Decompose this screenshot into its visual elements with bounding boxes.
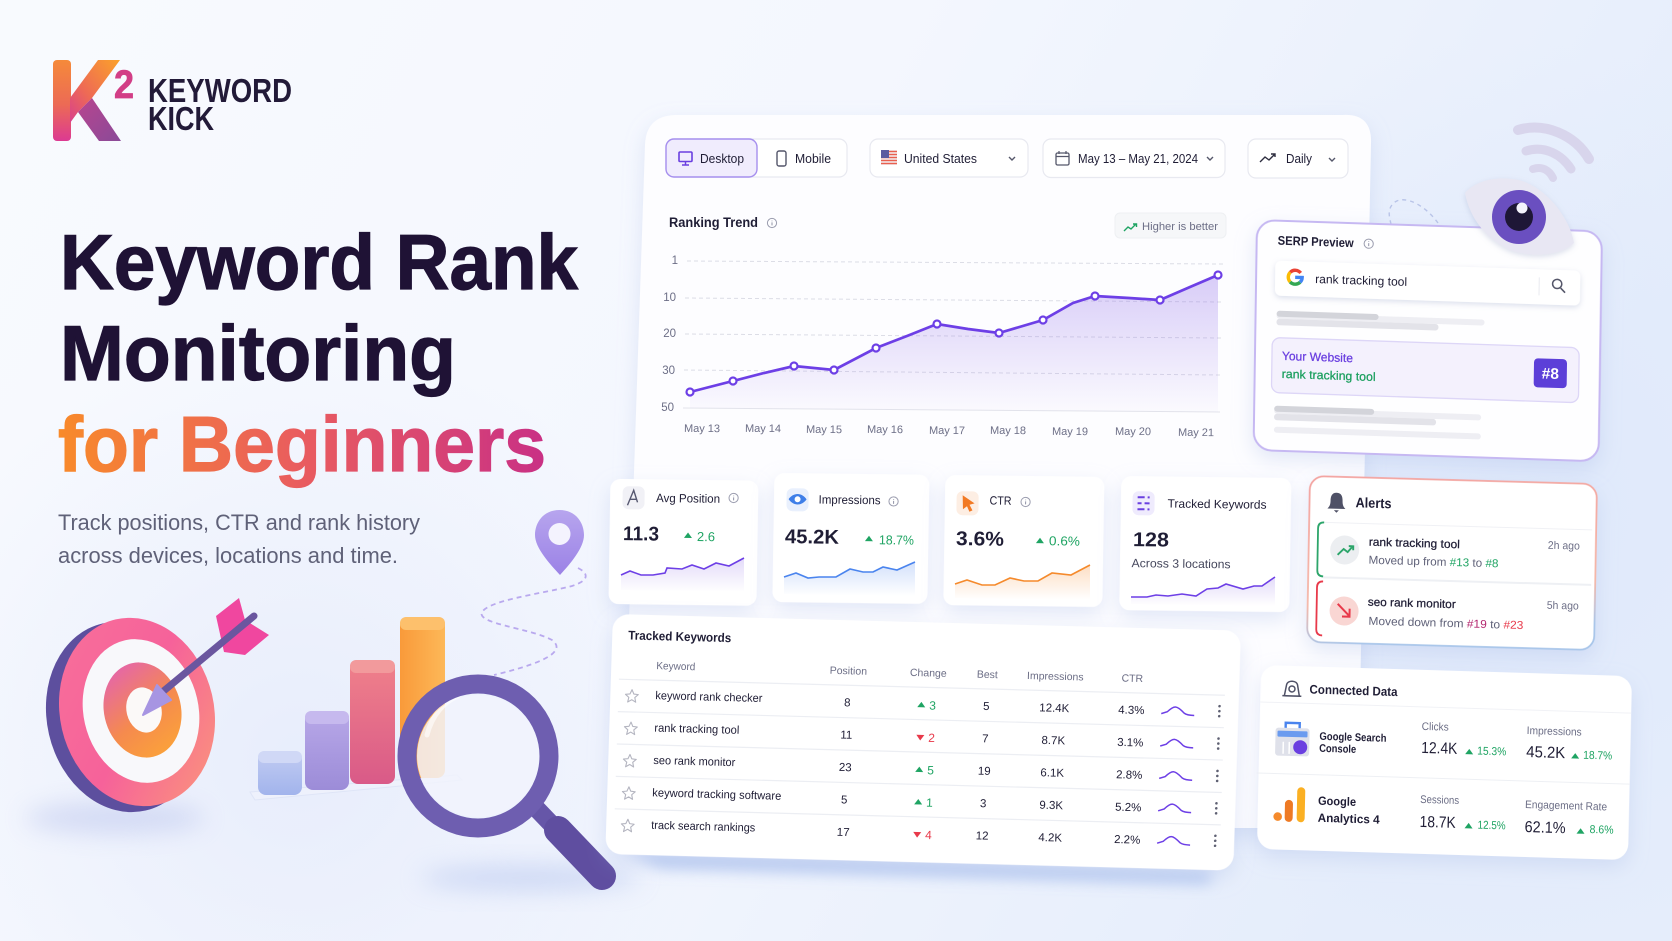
row: Google Search Console: 18.7% (1583, 750, 1612, 763)
highlighted result (1271, 338, 1579, 403)
row: track search rankings: 4.2K (1038, 832, 1063, 845)
alert: moved down: seo rank monitor (1368, 597, 1456, 611)
table header (656, 660, 1144, 685)
subtitle: across devices, locations and time. (58, 543, 398, 568)
interval dropdown: Daily (1286, 152, 1313, 166)
icon: position (622, 486, 645, 509)
panel: SERP preview (1254, 200, 1602, 461)
x axis labels: May 21 (1178, 427, 1214, 439)
row: keyword tracking software: 5 (841, 794, 848, 807)
stat card: CTR: CTR (989, 494, 1012, 508)
row: Google Analytics 4 (1273, 786, 1614, 839)
logo mark: K2 (53, 60, 134, 141)
row: Google Search Console (1275, 716, 1613, 766)
panel: connected data (1255, 665, 1632, 860)
logo wordmark: KICK (148, 100, 214, 137)
row: Google Analytics 4: 62.1% (1524, 819, 1566, 837)
illustration: magnifying glass (407, 684, 640, 891)
stat card: Impressions (772, 473, 929, 604)
highlighted result: rank tracking tool (1282, 367, 1376, 384)
illustration: target with arrow (25, 598, 269, 834)
row: rank tracking tool (624, 722, 1220, 753)
dashed orbit (1389, 200, 1438, 224)
row: seo rank monitor: 19 (978, 766, 991, 778)
title: Monitoring (60, 309, 456, 397)
row: Google Analytics 4: Analytics 4 (1318, 811, 1380, 827)
x axis labels: May 14 (745, 423, 781, 435)
table header: Impressions (1027, 670, 1084, 684)
y axis labels: 30 (662, 365, 675, 377)
y axis labels (661, 255, 678, 414)
placeholder results (1274, 406, 1481, 439)
y axis labels: 10 (663, 292, 676, 304)
row: Google Search Console: 15.3% (1477, 746, 1506, 758)
heading: SERP Preview (1278, 234, 1354, 250)
row: track search rankings (621, 819, 1217, 850)
title (58, 218, 579, 488)
row: Google Analytics 4: 8.6% (1589, 824, 1614, 837)
subtitle: Track positions, CTR and rank history (58, 510, 420, 535)
alert: moved down: 5h ago (1547, 600, 1579, 613)
line chart: ranking trend (661, 255, 1223, 439)
sparkline (784, 562, 915, 596)
row: keyword tracking software (622, 786, 1218, 817)
alert: moved up: 2h ago (1548, 540, 1580, 553)
row: keyword tracking software: 1 (926, 796, 933, 810)
y axis labels: 20 (663, 328, 676, 340)
row: track search rankings: 2.2% (1114, 834, 1140, 847)
row: keyword tracking software: 3 (980, 798, 987, 810)
stat card: Avg Position: 11.3 (623, 523, 659, 546)
logo wordmark (148, 72, 292, 137)
row: keyword rank checker (625, 689, 1221, 720)
row: track search rankings: 4 (925, 828, 932, 842)
row: Google Search Console: 12.4K (1421, 740, 1458, 758)
logo: Keyword Kick (53, 60, 292, 141)
highlighted result: Your Website (1282, 349, 1353, 365)
row: Google Analytics 4: 18.7K (1419, 814, 1456, 832)
device tabs (666, 139, 847, 177)
x axis labels: May 13 (684, 423, 720, 435)
row: Google Search Console: Impressions (1527, 725, 1582, 739)
panel: tracked keywords table (605, 614, 1241, 871)
stat card: CTR: 0.6% (1049, 533, 1081, 549)
table header: Position (829, 665, 867, 678)
stat card: Tracked Keywords (1119, 476, 1291, 612)
row: seo rank monitor: 6.1K (1040, 767, 1065, 780)
alert: moved down: Moved down from #19 to #23 (1368, 616, 1524, 632)
device tabs: Mobile (795, 152, 831, 166)
table header: Keyword (656, 660, 696, 673)
search box: rank tracking tool (1315, 272, 1407, 289)
x axis labels (684, 423, 1214, 439)
row: keyword tracking software: 5.2% (1115, 802, 1141, 814)
heading: Tracked Keywords (628, 628, 732, 645)
table header: Best (977, 669, 998, 681)
x axis labels: May 19 (1052, 426, 1088, 438)
row: track search rankings: 12 (976, 830, 989, 843)
row: Google Analytics 4: 12.5% (1477, 820, 1506, 832)
icon: database (1282, 681, 1302, 696)
row: keyword rank checker: 5 (983, 701, 990, 713)
table header: CTR (1121, 673, 1144, 685)
stat card: CTR: 3.6% (956, 528, 1004, 551)
row: seo rank monitor: 2.8% (1116, 769, 1143, 782)
interval dropdown (1248, 139, 1348, 178)
heading: Alerts (1355, 494, 1392, 511)
stat card: Tracked Keywords: Across 3 locations (1131, 556, 1231, 571)
row: keyword rank checker: 3 (929, 698, 937, 713)
row: keyword rank checker: keyword rank checker (655, 690, 763, 705)
row: Google Search Console: Google Search (1319, 731, 1387, 745)
filter bar (666, 139, 1348, 178)
stat card: Impressions: Impressions (818, 493, 881, 507)
date dropdown: May 13 – May 21, 2024 (1078, 152, 1198, 166)
row: Google Search Console: 45.2K (1526, 744, 1566, 762)
row: rank tracking tool: 11 (840, 730, 852, 742)
row: Google Analytics 4: Google (1318, 794, 1356, 809)
row: Google Analytics 4: Engagement Rate (1525, 799, 1607, 813)
alert: moved up (1317, 522, 1592, 585)
badge: higher is better (1115, 213, 1226, 238)
panel: dashboard (623, 115, 1371, 828)
icon: list (1132, 491, 1155, 515)
stat card: Impressions: 45.2K (785, 526, 840, 549)
row: keyword rank checker: 8 (844, 697, 851, 709)
alert: moved up: rank tracking tool (1369, 537, 1460, 551)
sparkline (621, 558, 744, 592)
row: Google Search Console: Console (1319, 743, 1356, 756)
icon: cursor (956, 491, 979, 515)
icon: location pin with dashed route (482, 510, 586, 675)
row: track search rankings: track search rankings (651, 820, 756, 835)
y axis labels: 1 (672, 255, 678, 267)
x axis labels: May 17 (929, 425, 965, 437)
stat card: Impressions: 18.7% (879, 532, 914, 548)
row: seo rank monitor: seo rank monitor (653, 755, 736, 769)
icon: analytics (1273, 786, 1305, 822)
icon: search console (1275, 722, 1310, 756)
stat card: Avg Position: Avg Position (656, 491, 720, 506)
icon: eye (786, 488, 809, 511)
date dropdown (1043, 139, 1225, 178)
row: keyword tracking software: 9.3K (1039, 800, 1064, 812)
y axis labels: 50 (661, 402, 674, 414)
stat card: Avg Position (608, 479, 758, 606)
stat card: CTR (943, 475, 1104, 607)
row: track search rankings: 17 (837, 827, 850, 839)
rank badge (1534, 358, 1567, 388)
x axis labels: May 18 (990, 425, 1026, 437)
icon: bell (1327, 493, 1346, 513)
heading: Connected Data (1309, 682, 1399, 699)
row: seo rank monitor: 23 (839, 762, 852, 774)
title: Keyword Rank (60, 218, 579, 306)
badge: higher is better: Higher is better (1142, 221, 1218, 233)
logo mark: K2: 2 (114, 63, 134, 107)
illustration: 3D bar chart (250, 617, 462, 800)
x axis labels: May 15 (806, 424, 842, 436)
x axis labels: May 16 (867, 424, 903, 436)
alert: moved up: Moved up from #13 to #8 (1368, 555, 1499, 570)
heading: Ranking Trend: Ranking Trend (669, 215, 758, 230)
row: seo rank monitor: 5 (927, 763, 934, 777)
rank badge: #8 (1542, 365, 1559, 383)
row: Google Analytics 4: Sessions (1420, 794, 1460, 807)
row: rank tracking tool: 2 (928, 731, 935, 745)
table drop shadow (625, 852, 1210, 884)
search box (1275, 261, 1580, 306)
stat card: Tracked Keywords: 128 (1133, 529, 1169, 552)
row: keyword rank checker: 4.3% (1118, 704, 1145, 717)
panel: alerts (1307, 476, 1597, 650)
row: rank tracking tool: 7 (982, 733, 989, 745)
row: keyword tracking software: keyword tracking software (652, 787, 781, 803)
logo wordmark: KEYWORD (148, 72, 292, 109)
alert: moved down (1316, 581, 1579, 643)
sparkline (1131, 577, 1275, 606)
stat card: Tracked Keywords: Tracked Keywords (1167, 497, 1267, 512)
device tabs: Desktop (700, 152, 744, 166)
row: keyword rank checker: 12.4K (1039, 702, 1070, 715)
row: rank tracking tool: rank tracking tool (654, 723, 740, 737)
row: rank tracking tool: 8.7K (1041, 735, 1066, 747)
icon: eye with signal arcs (1465, 128, 1589, 255)
subtitle (58, 510, 420, 568)
title: for Beginners (58, 400, 546, 488)
row: seo rank monitor (623, 754, 1219, 785)
row: Google Search Console: Clicks (1422, 721, 1449, 734)
arrow (143, 598, 269, 715)
country dropdown (870, 139, 1028, 177)
row: rank tracking tool: 3.1% (1117, 737, 1144, 750)
placeholder result (1276, 311, 1485, 332)
country dropdown: United States (904, 152, 977, 166)
x axis labels: May 20 (1115, 426, 1151, 438)
sparkline (955, 565, 1090, 600)
table header: Change (910, 667, 947, 680)
stat card: Avg Position: 2.6 (697, 529, 715, 544)
